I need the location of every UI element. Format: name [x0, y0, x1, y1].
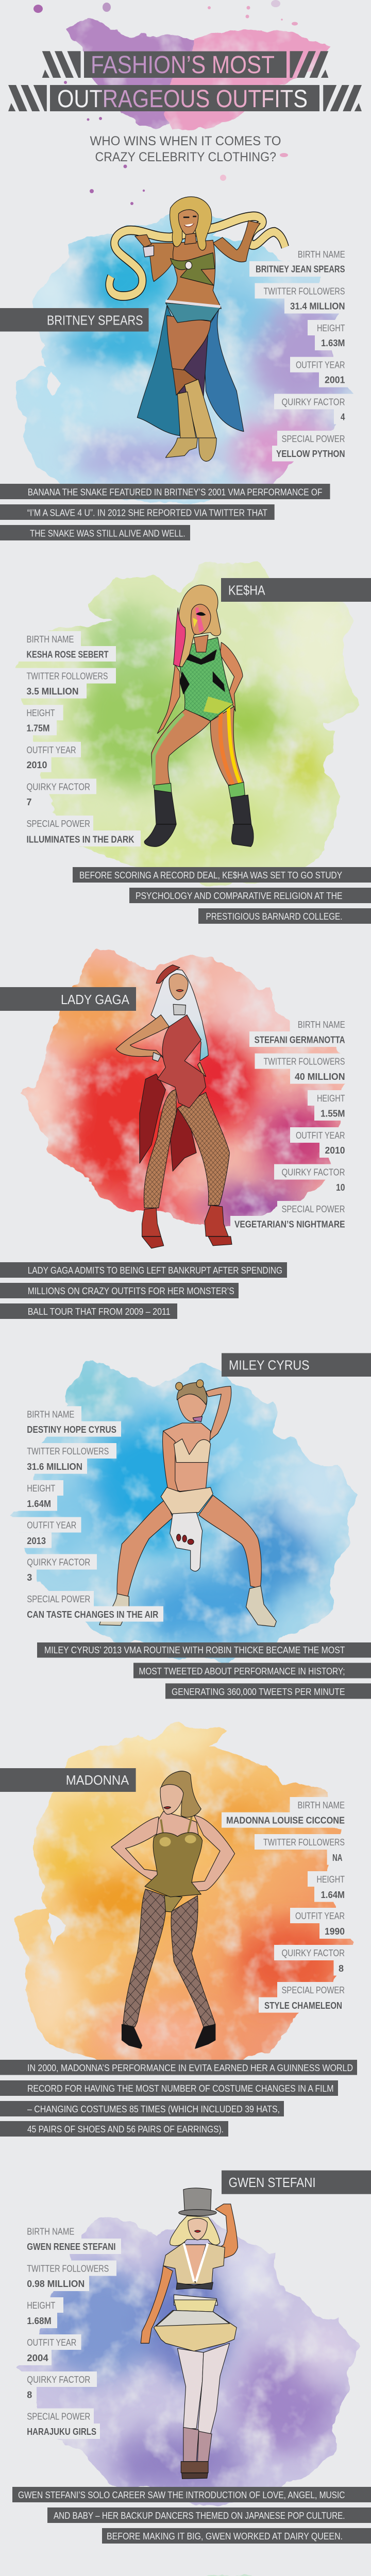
stat: quirky factor: [0, 2371, 97, 2402]
stat: quirky factor: 7: [27, 797, 32, 807]
stat: quirky factor: QUIRKY FACTOR: [27, 2375, 90, 2385]
stat: outfit year: 2001: [325, 375, 345, 385]
stat: quirky factor: [274, 394, 371, 424]
caption: Britney: BANANA THE SNAKE FEATURED IN BRITNEY’S 2001 VMA PERFORMANCE OF: [28, 486, 322, 497]
panel: Katy Perry: [207, 2574, 252, 2576]
stat: twitter followers: [0, 668, 116, 699]
stat: height: 1.64M: [27, 1499, 51, 1509]
stat: height: [0, 2297, 63, 2328]
stat: outfit year: OUTFIT YEAR: [27, 2337, 76, 2348]
stat: height: 1.68M: [27, 2316, 52, 2326]
stat: height: HEIGHT: [27, 708, 55, 718]
stats: Madonna: [222, 1797, 371, 2013]
caption: Miley: [37, 1642, 371, 1699]
stats: Miley: [0, 1406, 163, 1622]
stat: quirky factor: [0, 1554, 97, 1585]
caption: Madonna: – CHANGING COSTUMES 85 TIMES (WHICH INCLUDED 39 HATS,: [27, 2104, 280, 2114]
caption: Britney: THE SNAKE WAS STILL ALIVE AND WELL.: [30, 528, 185, 538]
stat: twitter followers: TWITTER FOLLOWERS: [264, 1057, 345, 1067]
stat: outfit year: [290, 1908, 371, 1939]
stat: birth name: [249, 1016, 371, 1047]
stat: special power: [0, 816, 141, 846]
figure: Lady Gaga: [116, 965, 232, 1248]
stat: birth name: BIRTH NAME: [27, 1409, 74, 1419]
stat: birth name: [0, 2224, 121, 2254]
subtitle: CRAZY CELEBRITY CLOTHING?: [95, 150, 276, 164]
stat: special power: ILLUMINATES IN THE DARK: [27, 835, 134, 845]
stat: quirky factor: QUIRKY FACTOR: [281, 1167, 345, 1178]
stat: birth name: BIRTH NAME: [298, 1800, 345, 1810]
stat: birth name: BIRTH NAME: [27, 2227, 74, 2237]
panel: Ke$ha: [0, 556, 371, 924]
panel: Madonna: [0, 1716, 371, 2137]
stat: twitter followers: 31.4 MILLION: [290, 301, 345, 311]
caption: Britney: “I’M A SLAVE 4 U”. IN 2012 SHE REPORTED VIA TWITTER THAT: [27, 507, 267, 518]
stat: birth name: DESTINY HOPE CYRUS: [27, 1425, 116, 1435]
figure: Britney with snake: [109, 197, 285, 461]
stat: twitter followers: [255, 1054, 371, 1084]
caption: Gaga: BALL TOUR THAT FROM 2009 – 2011: [28, 1306, 171, 1317]
watercolor: Madonna: [14, 1722, 354, 2060]
watercolor: Katy: [207, 2574, 252, 2576]
figure: Kesha: [144, 585, 254, 846]
caption: Kesha: PRESTIGIOUS BARNARD COLLEGE.: [206, 911, 342, 922]
caption: Kesha: [73, 867, 371, 924]
stat: outfit year: OUTFIT YEAR: [27, 745, 76, 755]
figure: Gwen Stefani: [141, 2188, 238, 2479]
stat: special power: [230, 1201, 371, 1231]
watercolor: Kesha: [15, 561, 360, 887]
stat: outfit year: [0, 2334, 81, 2365]
stat: outfit year: OUTFIT YEAR: [296, 360, 345, 370]
stat: twitter followers: 0.98 MILLION: [27, 2279, 85, 2289]
stat: birth name: KESHA ROSE SEBERT: [27, 649, 108, 659]
stat: outfit year: OUTFIT YEAR: [296, 1130, 345, 1141]
name banner: Kesha: KE$HA: [228, 582, 265, 598]
stat: special power: STYLE CHAMELEON: [264, 2001, 342, 2011]
stat: birth name: BIRTH NAME: [298, 1020, 345, 1030]
name banner: Madonna: MADONNA: [66, 1772, 129, 1788]
stat: birth name: [249, 246, 371, 277]
stat: twitter followers: 31.6 MILLION: [27, 1462, 82, 1472]
stat: birth name: [222, 1797, 371, 1828]
name banner: Gwen Stefani: GWEN STEFANI: [229, 2175, 316, 2190]
stat: height: 1.75M: [27, 723, 49, 734]
stat: birth name: BIRTH NAME: [27, 634, 74, 645]
stat: quirky factor: QUIRKY FACTOR: [27, 782, 90, 792]
stat: birth name: BRITNEY JEAN SPEARS: [256, 264, 345, 275]
caption: Gaga: MILLIONS ON CRAZY OUTFITS FOR HER MONSTER’S: [28, 1285, 234, 1296]
header watercolor splash: [33, 0, 330, 205]
stat: outfit year: [0, 742, 81, 772]
stat: outfit year: 2013: [27, 1536, 46, 1546]
stat: twitter followers: NA: [332, 1853, 342, 1863]
stat: birth name: STEFANI GERMANOTTA: [255, 1035, 345, 1045]
header panel: [8, 0, 362, 205]
stat: height: 1.55M: [321, 1109, 345, 1119]
stat: quirky factor: 4: [341, 412, 345, 422]
stat: height: [308, 1090, 371, 1121]
stat: height: 1.64M: [321, 1890, 345, 1900]
stat: quirky factor: QUIRKY FACTOR: [27, 1557, 90, 1567]
stats: Britney: [249, 246, 371, 462]
watercolor: Miley: [10, 1360, 358, 1663]
stat: quirky factor: 3: [27, 1572, 32, 1583]
stat: height: HEIGHT: [316, 1874, 345, 1885]
stat: special power: SPECIAL POWER: [27, 819, 90, 829]
stat: birth name: [0, 1406, 121, 1437]
stat: outfit year: [0, 1517, 81, 1548]
figure: Miley Cyrus: [99, 1380, 276, 1626]
name banner: Gwen Stefani: [222, 2171, 371, 2194]
stat: quirky factor: [274, 1164, 371, 1195]
caption: Madonna: [0, 2060, 357, 2137]
watercolor: Gaga: [21, 948, 345, 1227]
stats: Kesha: [0, 631, 141, 846]
stat: height: [308, 1871, 371, 1902]
stat: quirky factor: QUIRKY FACTOR: [281, 1948, 345, 1958]
stat: special power: SPECIAL POWER: [27, 2412, 90, 2422]
stats: Gwen: [0, 2224, 121, 2439]
stat: birth name: MADONNA LOUISE CICCONE: [226, 1816, 345, 1826]
stat: twitter followers: [255, 283, 371, 313]
stat: special power: [0, 2409, 100, 2439]
stat: twitter followers: [0, 1443, 116, 1474]
stat: special power: SPECIAL POWER: [281, 434, 345, 444]
stat: height: HEIGHT: [27, 1483, 55, 1494]
stat: quirky factor: 8: [339, 1963, 344, 1974]
caption: Gwen: [12, 2487, 371, 2544]
figure: Madonna: [111, 1771, 235, 2048]
name banner: Madonna: [0, 1768, 136, 1792]
name banner: Britney Spears: [0, 308, 148, 332]
caption: Britney: [0, 484, 330, 540]
name banner: Lady Gaga: [0, 987, 136, 1011]
name banner: Miley Cyrus: MILEY CYRUS: [229, 1358, 310, 1373]
stat: height: [308, 320, 371, 350]
stat: height: HEIGHT: [317, 323, 345, 333]
name banner: Kesha: [221, 578, 371, 602]
stat: special power: [259, 1982, 371, 2013]
stat: height: [0, 1480, 63, 1511]
stat: birth name: BIRTH NAME: [298, 249, 345, 260]
stat: birth name: GWEN RENEE STEFANI: [27, 2242, 115, 2252]
stat: twitter followers: TWITTER FOLLOWERS: [264, 286, 345, 297]
panel: Britney Spears: [0, 196, 371, 540]
name banner: Britney Spears: BRITNEY SPEARS: [47, 312, 143, 328]
caption: Gaga: [0, 1262, 287, 1319]
stat: twitter followers: TWITTER FOLLOWERS: [27, 2264, 109, 2274]
stat: outfit year: 2004: [27, 2353, 48, 2363]
stat: outfit year: 2010: [325, 1145, 345, 1156]
stat: special power: SPECIAL POWER: [281, 1985, 345, 1995]
subtitle: WHO WINS WHEN IT COMES TO: [90, 134, 281, 148]
stat: outfit year: 1990: [325, 1926, 345, 1937]
stat: special power: [0, 1591, 163, 1622]
panel: Lady Gaga: [0, 943, 371, 1319]
stat: birth name: [0, 631, 116, 662]
stat: twitter followers: TWITTER FOLLOWERS: [263, 1837, 345, 1848]
caption: Madonna: 45 PAIRS OF SHOES AND 56 PAIRS OF EARRINGS).: [27, 2124, 224, 2134]
stat: quirky factor: QUIRKY FACTOR: [281, 397, 345, 407]
watercolor: Gwen: [16, 2217, 360, 2506]
stat: outfit year: [290, 1127, 371, 1158]
snake behind: [109, 216, 285, 296]
stat: height: HEIGHT: [317, 1093, 345, 1104]
subtitle: [90, 134, 281, 164]
stat: height: [0, 705, 63, 735]
caption: Gaga: LADY GAGA ADMITS TO BEING LEFT BANKRUPT AFTER SPENDING: [28, 1265, 282, 1276]
stat: twitter followers: TWITTER FOLLOWERS: [27, 671, 108, 682]
stat: quirky factor: [274, 1945, 371, 1976]
stat: twitter followers: 40 MILLION: [295, 1072, 345, 1082]
stat: height: 1.63M: [321, 338, 345, 348]
stat: special power: CAN TASTE CHANGES IN THE AIR: [27, 1609, 158, 1620]
caption: Miley: GENERATING 360,000 TWEETS PER MINUTE: [172, 1686, 345, 1697]
stat: outfit year: [290, 357, 371, 387]
name banner: Lady Gaga: LADY GAGA: [61, 992, 130, 1007]
stat: special power: YELLOW PYTHON: [276, 449, 345, 459]
stat: special power: SPECIAL POWER: [27, 1594, 90, 1604]
stat: outfit year: 2010: [27, 760, 47, 770]
name banner: Miley Cyrus: [222, 1353, 371, 1377]
panel: Miley Cyrus: [0, 1350, 371, 1699]
stat: special power: HARAJUKU GIRLS: [27, 2427, 96, 2437]
stats: Gaga: [230, 1016, 371, 1231]
watercolor: Britney: [15, 214, 353, 504]
stat: twitter followers: [0, 2261, 116, 2291]
stat: twitter followers: TWITTER FOLLOWERS: [27, 1446, 109, 1456]
title line 1 banner: FASHION’S MOST: [91, 52, 275, 79]
stat: outfit year: OUTFIT YEAR: [27, 1520, 76, 1531]
stat: twitter followers: [255, 1834, 371, 1865]
panel: Gwen Stefani: [0, 2171, 371, 2544]
stat: special power: SPECIAL POWER: [281, 1204, 345, 1214]
stat: special power: [272, 431, 371, 462]
stat: quirky factor: [0, 778, 96, 809]
stat: height: HEIGHT: [27, 2300, 55, 2311]
stat: quirky factor: 10: [336, 1182, 345, 1193]
caption: Kesha: PSYCHOLOGY AND COMPARATIVE RELIGION AT THE: [136, 890, 342, 901]
stat: special power: VEGETARIAN’S NIGHTMARE: [234, 1219, 345, 1229]
title line 2 banner: OUTRAGEOUS OUTFITS: [57, 86, 308, 113]
stat: quirky factor: 8: [27, 2389, 32, 2400]
stat: outfit year: OUTFIT YEAR: [295, 1911, 345, 1921]
stat: twitter followers: 3.5 MILLION: [27, 686, 78, 697]
